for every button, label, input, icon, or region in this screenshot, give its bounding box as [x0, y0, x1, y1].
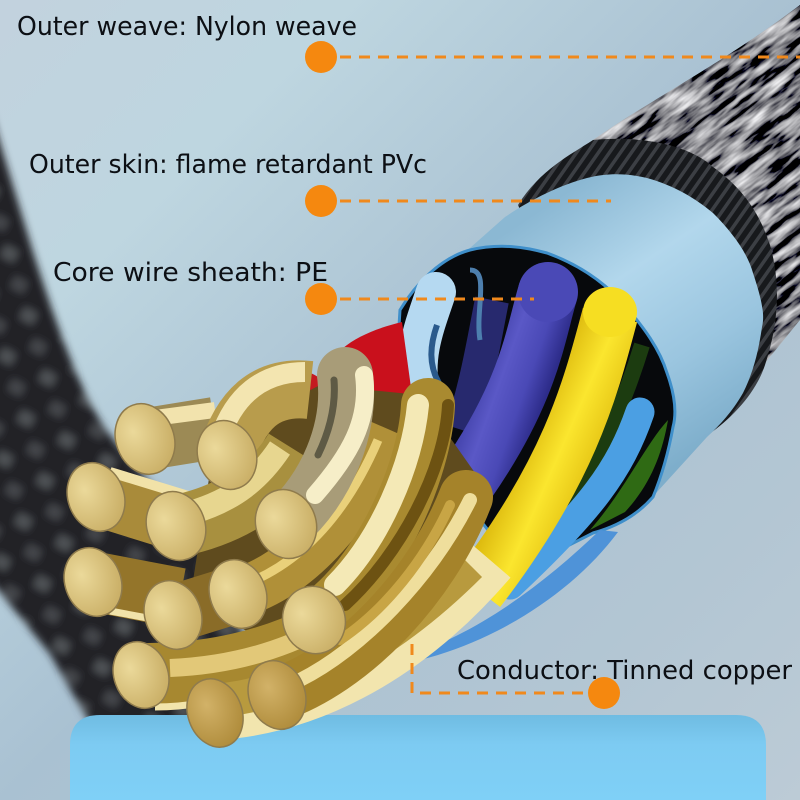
callout: core wire sheath — [53, 258, 534, 315]
yellow wire — [478, 315, 610, 590]
strand 9 — [142, 600, 385, 707]
callout: outer skin: Outer skin: flame retardant PVc — [29, 150, 427, 180]
strand 11 — [216, 560, 490, 713]
strand 2 — [220, 372, 310, 458]
callout: outer weave: Outer weave: Nylon weave — [17, 12, 357, 42]
sleeve opening interior — [395, 246, 675, 570]
gold cavity between strands — [190, 385, 480, 660]
gold conductor strands — [96, 372, 490, 713]
callout: conductor — [412, 644, 792, 709]
carbon band — [518, 139, 777, 437]
blue wire — [466, 292, 548, 482]
red wire sleeves — [278, 322, 412, 405]
strand 10 — [315, 405, 448, 619]
dark indigo inner wire — [462, 300, 492, 430]
conductor end caps — [55, 395, 355, 755]
bottom blue panel — [70, 715, 766, 800]
braided cable: left loop — [0, 110, 290, 740]
yellow wire rounded tip — [583, 287, 637, 337]
strand 8 — [238, 430, 390, 593]
strand 4 — [177, 448, 295, 526]
callout: conductor: Conductor: Tinned copper — [457, 656, 792, 686]
callout: outer weave — [17, 12, 800, 73]
strand 7 — [173, 590, 250, 614]
strand 12 — [277, 497, 470, 695]
light blue wire — [510, 412, 640, 585]
metal sleeve — [400, 174, 763, 533]
strand 6 — [96, 582, 185, 625]
silver weave body — [593, 5, 800, 362]
strand 5 — [286, 375, 365, 524]
white-blue wire — [418, 292, 440, 395]
dark green stripe — [565, 345, 642, 510]
braided cable: top right — [518, 5, 800, 432]
light blue jacket — [420, 530, 618, 660]
strand 1 — [147, 410, 215, 439]
callout: core wire sheath: Core wire sheath: PE — [53, 258, 328, 288]
blue wire rounded tip — [518, 262, 578, 322]
green reflection — [590, 420, 668, 530]
smoke-blue reflection — [470, 270, 481, 340]
callout: outer skin — [29, 150, 611, 217]
strand 3 — [100, 472, 195, 525]
